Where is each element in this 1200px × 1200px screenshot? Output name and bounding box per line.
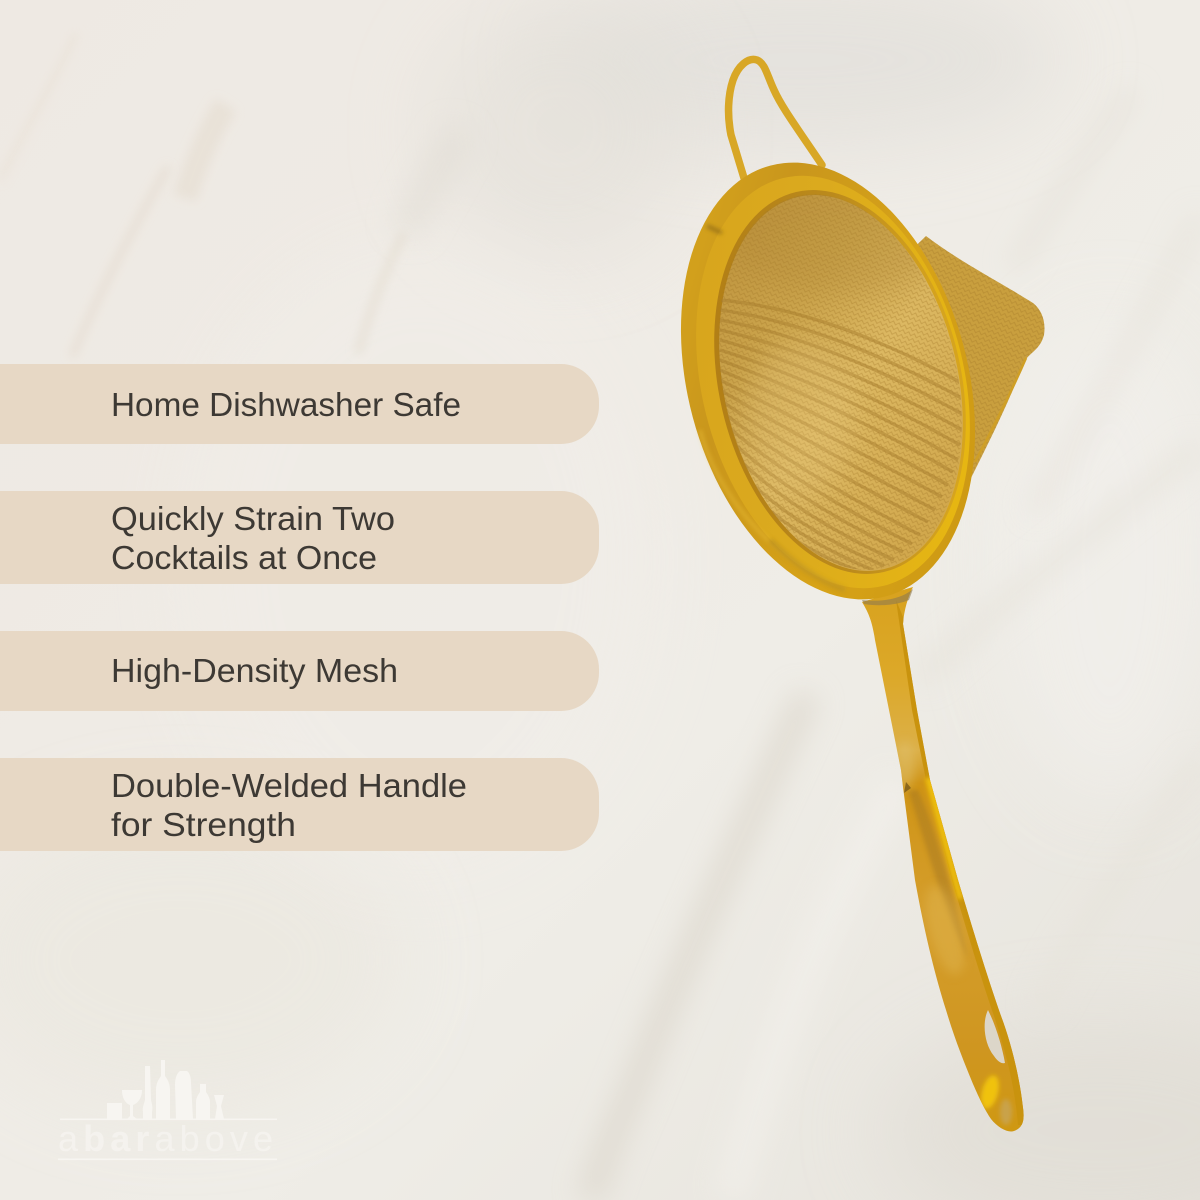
feature pill: Quickly Strain Two Cocktails at Once [0, 491, 599, 584]
wordmark: abarabove [58, 1118, 273, 1159]
handle hanging hole [985, 1010, 1005, 1063]
wire hanging loop [729, 59, 822, 178]
logo: a bar above [58, 1060, 277, 1160]
mesh cone back [860, 236, 1045, 480]
feature pill: High-Density Mesh [0, 631, 599, 711]
feature pill: Double-Welded Handle for Strength: Double-Welded Handle [111, 767, 467, 804]
outer rim [635, 129, 1021, 633]
feature pill: Home Dishwasher Safe: Home Dishwasher Safe [111, 386, 461, 423]
feature pill: Quickly Strain Two Cocktails at Once: Cocktails at Once [111, 539, 377, 576]
handle collar [862, 589, 913, 605]
feature pill: Double-Welded Handle for Strength: for Strength [111, 806, 296, 843]
feature pill: High-Density Mesh: High-Density Mesh [111, 652, 398, 689]
rim highlights [700, 226, 845, 590]
mesh bowl [719, 194, 963, 571]
rim shadow lip [678, 165, 1002, 599]
rim inner band [655, 147, 1011, 617]
strainer product illustration [680, 56, 1044, 1132]
feature pill: Double-Welded Handle for Strength [0, 758, 599, 851]
feature pill: Quickly Strain Two Cocktails at Once: Quickly Strain Two [111, 500, 395, 537]
handle [862, 587, 1027, 1131]
feature pill: Home Dishwasher Safe [0, 364, 599, 444]
icon: bar shelf with bottles [107, 1060, 224, 1119]
